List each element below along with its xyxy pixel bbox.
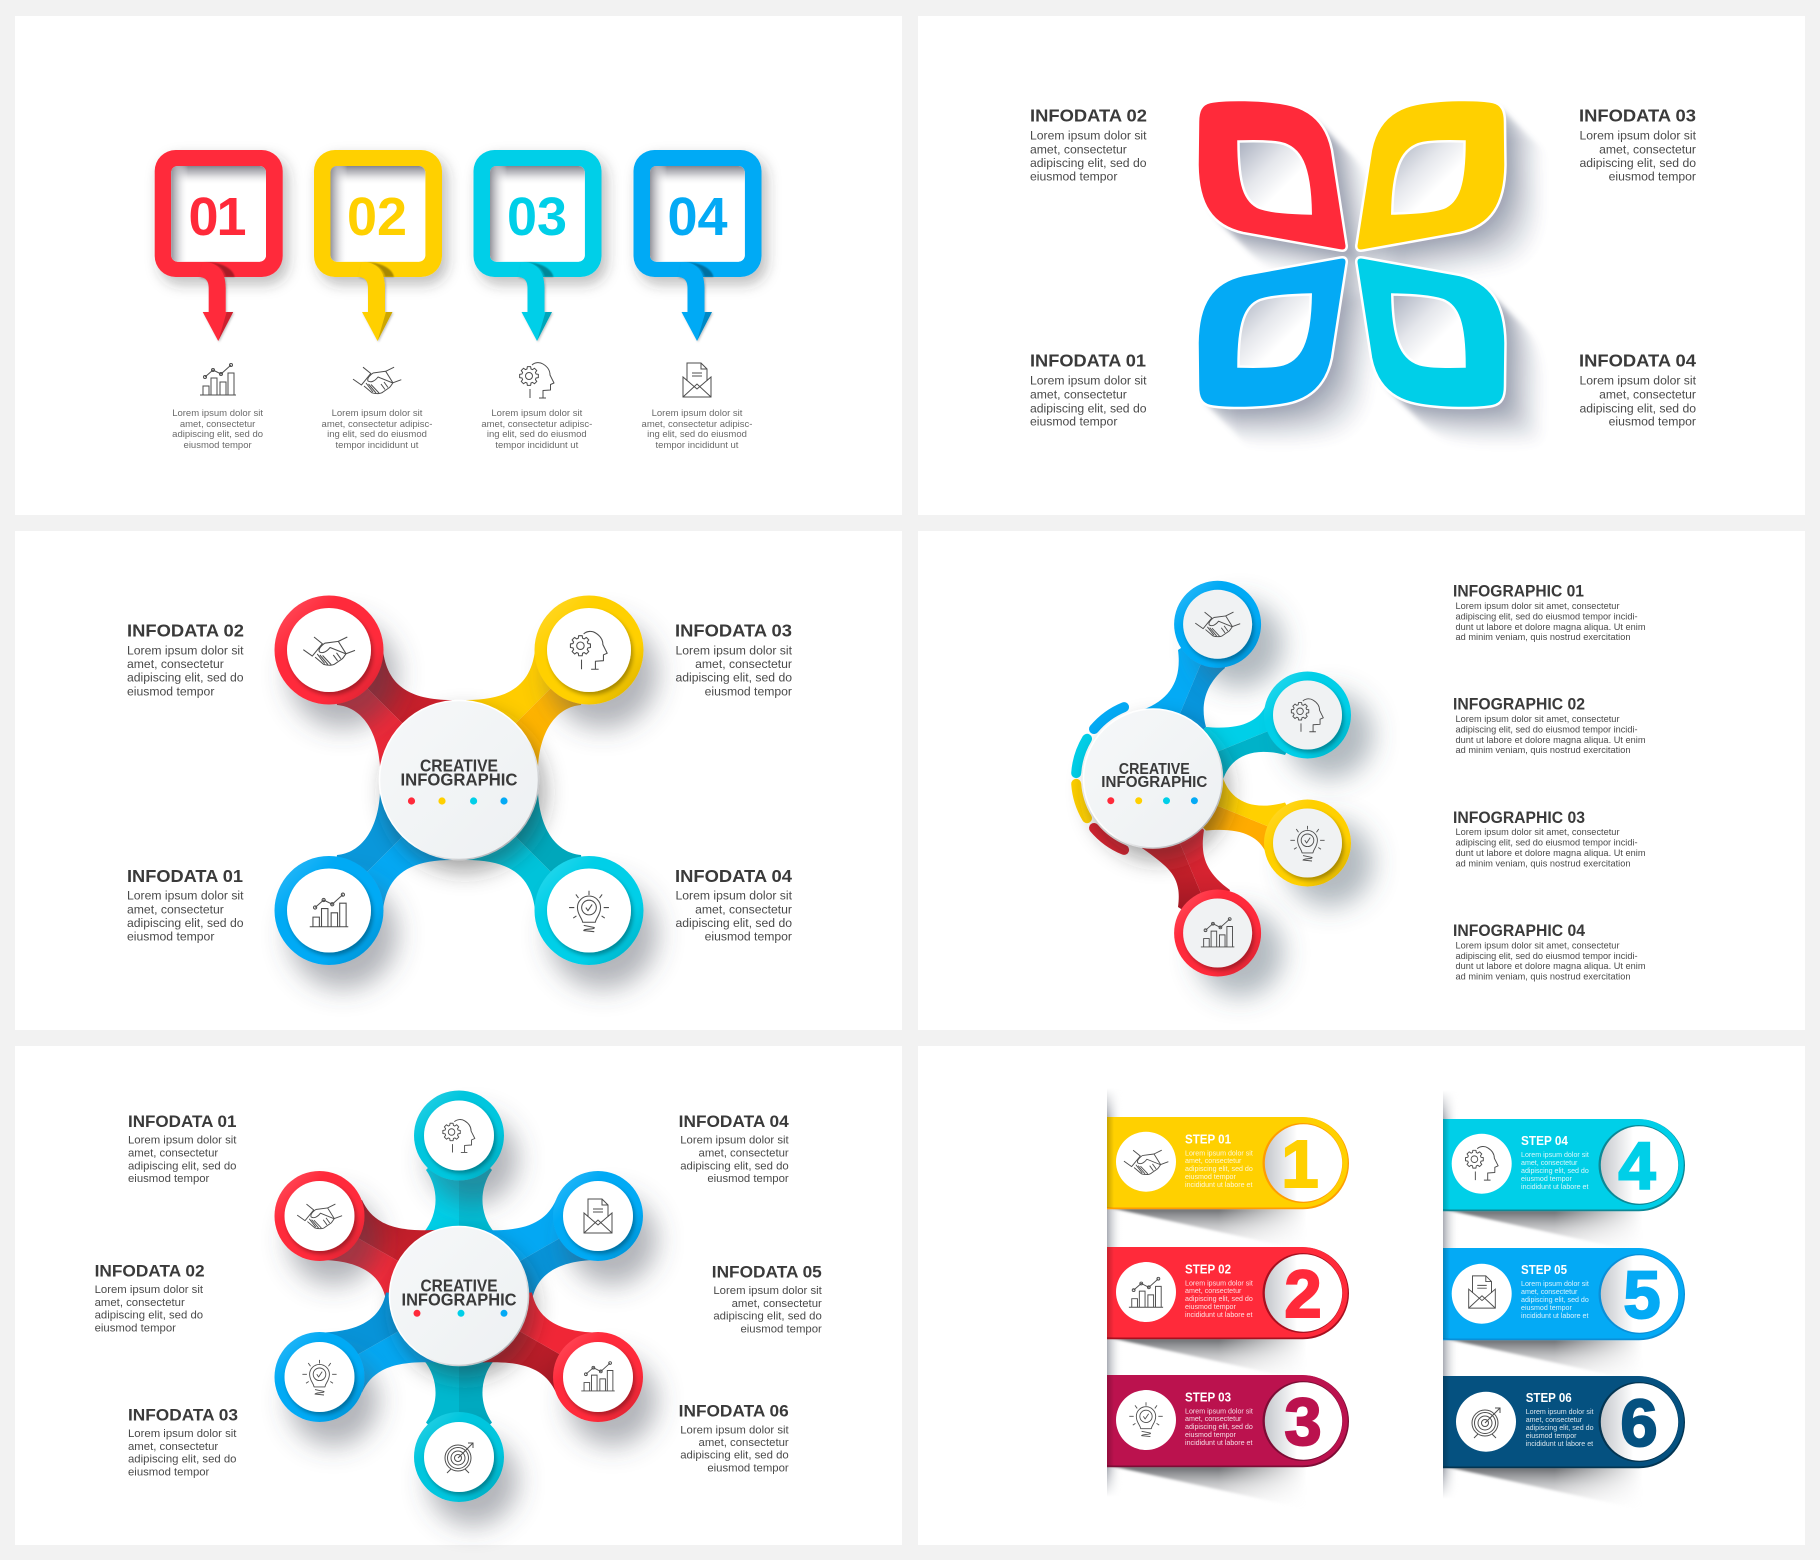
text: infodata 01: adipiscing elit, sed do bbox=[1030, 401, 1147, 415]
hub circle bbox=[1084, 709, 1222, 848]
text: infodata 03: Lorem ipsum dolor sit bbox=[1579, 128, 1697, 142]
arm: red bbox=[1142, 779, 1230, 933]
text: infographic 01: adipiscing elit, sed do eiusmod tempor incidi- bbox=[1456, 611, 1638, 621]
heading: infodata 02: INFODATA 02 bbox=[95, 1262, 205, 1280]
text: infodata 01: eiusmod tempor bbox=[127, 930, 214, 944]
arc segments bbox=[1076, 707, 1124, 850]
text: infodata 02: amet, consectetur bbox=[95, 1297, 185, 1309]
step text: amet, consectetur bbox=[1185, 1415, 1242, 1423]
text: infodata 03: eiusmod tempor bbox=[1609, 170, 1696, 184]
text: infodata 02: eiusmod tempor bbox=[1030, 170, 1117, 184]
heading: infodata 04: INFODATA 04 bbox=[679, 1113, 790, 1131]
text: infodata 03: eiusmod tempor bbox=[128, 1467, 210, 1479]
hub dots bbox=[414, 1310, 508, 1317]
text: infodata 01: amet, consectetur bbox=[1030, 388, 1127, 402]
step text: eiusmod tempor bbox=[1526, 1432, 1577, 1440]
text: infodata 02: Lorem ipsum dolor sit bbox=[1030, 128, 1147, 142]
text block 4: amet, consectetur adipisc- bbox=[642, 419, 752, 430]
node: yellow bbox=[534, 596, 644, 704]
text: infodata 02: adipiscing elit, sed do bbox=[95, 1310, 203, 1322]
step text: amet, consectetur bbox=[1185, 1287, 1242, 1295]
step 06 bbox=[1443, 1376, 1685, 1468]
heading: infodata 01: INFODATA 01 bbox=[127, 866, 243, 886]
text: infodata 05: eiusmod tempor bbox=[740, 1323, 822, 1335]
number 2: 2 bbox=[1284, 1257, 1322, 1332]
step text: eiusmod tempor bbox=[1521, 1304, 1572, 1312]
hub title: INFOGRAPHIC bbox=[400, 770, 518, 790]
panel: six-node hub bbox=[15, 1046, 902, 1545]
node: bottom bbox=[414, 1412, 504, 1502]
step title: STEP 06 bbox=[1526, 1391, 1572, 1405]
text: infographic 02: Lorem ipsum dolor sit amet, consectetur bbox=[1456, 714, 1620, 724]
text: infodata 01: eiusmod tempor bbox=[1030, 415, 1117, 429]
step 05 bbox=[1443, 1248, 1685, 1340]
hub title: INFOGRAPHIC bbox=[402, 1290, 517, 1310]
number 01: 01 bbox=[188, 187, 245, 247]
text: infodata 04: amet, consectetur bbox=[1599, 388, 1696, 402]
text block 2: ing elit, sed do eiusmod bbox=[327, 429, 427, 440]
text block 2: Lorem ipsum dolor sit bbox=[332, 408, 423, 419]
text block 1: amet, consectetur bbox=[180, 419, 255, 430]
hub title: INFOGRAPHIC bbox=[1101, 774, 1208, 791]
text: infodata 05: amet, consectetur bbox=[732, 1298, 822, 1310]
strip shadow 1 bbox=[1111, 1208, 1307, 1252]
step title: STEP 04 bbox=[1521, 1134, 1568, 1148]
number 3: 3 bbox=[1284, 1385, 1322, 1460]
step 02 bbox=[1107, 1247, 1349, 1339]
icon: chart bbox=[310, 893, 348, 927]
text block 4: tempor incididunt ut bbox=[656, 440, 739, 451]
text: infodata 01: amet, consectetur bbox=[128, 1148, 218, 1160]
step text: amet, consectetur bbox=[1521, 1288, 1578, 1296]
text: infographic 01: dunt ut labore et dolore magna aliqua. Ut enim bbox=[1456, 622, 1646, 632]
heading: infodata 02: INFODATA 02 bbox=[1030, 105, 1147, 125]
pin 03 bbox=[474, 150, 602, 341]
step text: eiusmod tempor bbox=[1521, 1175, 1572, 1183]
icon: chart bbox=[1201, 918, 1234, 947]
text: infodata 02: adipiscing elit, sed do bbox=[127, 671, 244, 685]
text: infodata 01: adipiscing elit, sed do bbox=[127, 916, 244, 930]
text: infodata 01: amet, consectetur bbox=[127, 902, 224, 916]
text: infographic 02: dunt ut labore et dolore magna aliqua. Ut enim bbox=[1456, 735, 1646, 745]
pin 04 bbox=[634, 150, 762, 341]
text: infodata 03: amet, consectetur bbox=[695, 657, 792, 671]
panel: numbered pins bbox=[15, 16, 902, 515]
text: infodata 05: Lorem ipsum dolor sit bbox=[713, 1285, 823, 1297]
step text: adipiscing elit, sed do bbox=[1185, 1165, 1253, 1173]
text: infodata 03: amet, consectetur bbox=[128, 1441, 218, 1453]
node: top bbox=[414, 1090, 504, 1180]
long shadows bbox=[1202, 105, 1546, 448]
panel: four petals bbox=[918, 16, 1805, 515]
icon: bulb bbox=[1129, 1402, 1163, 1437]
icon: chart bbox=[1129, 1277, 1163, 1307]
text: infographic 04: adipiscing elit, sed do eiusmod tempor incidi- bbox=[1456, 951, 1638, 961]
text: infographic 03: adipiscing elit, sed do eiusmod tempor incidi- bbox=[1456, 838, 1638, 848]
text block 4: Lorem ipsum dolor sit bbox=[652, 408, 743, 419]
petal: cyan bbox=[1356, 257, 1506, 408]
text: infodata 03: amet, consectetur bbox=[1599, 142, 1696, 156]
text: infodata 02: adipiscing elit, sed do bbox=[1030, 156, 1147, 170]
text: infodata 04: Lorem ipsum dolor sit bbox=[675, 889, 793, 903]
number 03: 03 bbox=[507, 187, 567, 247]
step text: adipiscing elit, sed do bbox=[1185, 1295, 1253, 1303]
text: infographic 03: Lorem ipsum dolor sit amet, consectetur bbox=[1456, 827, 1620, 837]
icon: bulb bbox=[569, 891, 609, 932]
text: infodata 04: eiusmod tempor bbox=[707, 1173, 789, 1185]
icon: handshake bbox=[297, 1204, 342, 1229]
arm: yellow bbox=[459, 650, 589, 780]
step 03 bbox=[1107, 1375, 1349, 1467]
arm: top cyan bbox=[424, 1136, 494, 1296]
step text: amet, consectetur bbox=[1526, 1416, 1583, 1424]
arm: bottom cyan bbox=[424, 1296, 494, 1456]
text: infodata 06: eiusmod tempor bbox=[707, 1463, 789, 1475]
step text: eiusmod tempor bbox=[1185, 1173, 1236, 1181]
heading: infodata 06: INFODATA 06 bbox=[679, 1403, 789, 1421]
text: infodata 01: Lorem ipsum dolor sit bbox=[127, 889, 244, 903]
text: infodata 03: adipiscing elit, sed do bbox=[675, 671, 792, 685]
icon: chart bbox=[581, 1362, 615, 1391]
icon: target bbox=[445, 1443, 473, 1473]
text: infodata 03: adipiscing elit, sed do bbox=[128, 1454, 236, 1466]
text block 4: ing elit, sed do eiusmod bbox=[647, 429, 747, 440]
step text: adipiscing elit, sed do bbox=[1521, 1167, 1589, 1175]
step text: eiusmod tempor bbox=[1185, 1431, 1236, 1439]
step title: STEP 02 bbox=[1185, 1262, 1231, 1276]
step text: amet, consectetur bbox=[1185, 1157, 1242, 1165]
heading: infodata 04: INFODATA 04 bbox=[1579, 351, 1696, 371]
node: red bbox=[274, 596, 384, 704]
text: infodata 04: eiusmod tempor bbox=[1609, 415, 1696, 429]
step text: incididunt ut labore et bbox=[1185, 1311, 1252, 1319]
icon: head with gear bbox=[520, 363, 554, 398]
arm: lower-right red bbox=[459, 1292, 598, 1392]
text: infodata 02: amet, consectetur bbox=[1030, 142, 1127, 156]
text: infodata 01: Lorem ipsum dolor sit bbox=[128, 1134, 237, 1146]
text: infodata 04: amet, consectetur bbox=[699, 1148, 789, 1160]
step title: STEP 01 bbox=[1185, 1132, 1231, 1146]
icon: head bbox=[570, 631, 607, 669]
hub circle bbox=[380, 700, 538, 860]
step text: adipiscing elit, sed do bbox=[1185, 1423, 1253, 1431]
step text: Lorem ipsum dolor sit bbox=[1185, 1279, 1253, 1287]
icon: handshake bbox=[353, 367, 401, 394]
step text: Lorem ipsum dolor sit bbox=[1185, 1149, 1253, 1157]
text: infodata 06: Lorem ipsum dolor sit bbox=[680, 1424, 790, 1436]
icon: bulb bbox=[302, 1360, 337, 1395]
text block 1: adipiscing elit, sed do bbox=[172, 429, 263, 440]
heading: infodata 01: INFODATA 01 bbox=[128, 1113, 236, 1131]
strip shadow 4 bbox=[1447, 1210, 1643, 1254]
arm: upper-left red bbox=[320, 1200, 459, 1300]
left column fold shadow bbox=[1107, 1091, 1118, 1494]
petal: yellow bbox=[1356, 100, 1506, 251]
icon: head bbox=[1291, 699, 1323, 732]
node: lower right bbox=[553, 1332, 643, 1422]
arm: cyan bbox=[1153, 705, 1308, 783]
text: infodata 06: adipiscing elit, sed do bbox=[680, 1450, 789, 1462]
heading: infographic 02: INFOGRAPHIC 02 bbox=[1453, 694, 1585, 713]
number 04: 04 bbox=[667, 187, 728, 247]
text: infographic 03: dunt ut labore et dolore magna aliqua. Ut enim bbox=[1456, 848, 1646, 858]
text block 1: Lorem ipsum dolor sit bbox=[172, 408, 263, 419]
text: infodata 02: amet, consectetur bbox=[127, 657, 224, 671]
hole: yellow bbox=[1392, 141, 1464, 214]
hub dots bbox=[1107, 797, 1198, 804]
arm: blue bbox=[329, 780, 459, 910]
heading: infodata 01: INFODATA 01 bbox=[1030, 351, 1146, 371]
text: infodata 04: adipiscing elit, sed do bbox=[675, 916, 792, 930]
heading: infographic 01: INFOGRAPHIC 01 bbox=[1453, 581, 1584, 600]
text: infographic 02: ad minim veniam, quis nostrud exercitation bbox=[1456, 745, 1630, 755]
icon: head bbox=[1466, 1146, 1498, 1180]
arm: upper-right blue bbox=[459, 1200, 598, 1300]
step text: eiusmod tempor bbox=[1185, 1303, 1236, 1311]
strip shadow 6 bbox=[1447, 1467, 1643, 1511]
icon: handshake bbox=[1195, 612, 1240, 637]
step text: Lorem ipsum dolor sit bbox=[1521, 1280, 1589, 1288]
heading: infodata 03: INFODATA 03 bbox=[675, 621, 792, 641]
icon: handshake bbox=[303, 637, 355, 665]
step text: incididunt ut labore et bbox=[1185, 1181, 1252, 1189]
heading: infodata 03: INFODATA 03 bbox=[1579, 105, 1696, 125]
text: infodata 04: Lorem ipsum dolor sit bbox=[680, 1134, 790, 1146]
node: blue bbox=[274, 856, 384, 965]
text: infographic 01: ad minim veniam, quis nostrud exercitation bbox=[1456, 632, 1630, 642]
heading: infodata 05: INFODATA 05 bbox=[712, 1263, 822, 1281]
step title: STEP 05 bbox=[1521, 1263, 1567, 1277]
step text: adipiscing elit, sed do bbox=[1526, 1424, 1594, 1432]
text: infodata 02: eiusmod tempor bbox=[95, 1323, 176, 1335]
number 5: 5 bbox=[1623, 1258, 1661, 1333]
icon: mail bbox=[584, 1199, 612, 1233]
arm: cyan bbox=[459, 780, 589, 910]
hub circle bbox=[390, 1226, 528, 1366]
pin 01 bbox=[155, 150, 283, 341]
step 01 bbox=[1107, 1117, 1349, 1209]
strip shadow 2 bbox=[1111, 1338, 1307, 1382]
text: infographic 04: ad minim veniam, quis nostrud exercitation bbox=[1456, 972, 1630, 982]
heading: infodata 03: INFODATA 03 bbox=[128, 1407, 238, 1425]
hub title: CREATIVE bbox=[420, 1275, 498, 1295]
step text: adipiscing elit, sed do bbox=[1521, 1296, 1589, 1304]
panel: branching hub bbox=[918, 531, 1805, 1030]
number 02: 02 bbox=[347, 187, 407, 247]
step text: Lorem ipsum dolor sit bbox=[1526, 1408, 1594, 1416]
text: infodata 04: adipiscing elit, sed do bbox=[680, 1160, 789, 1172]
hub title: CREATIVE bbox=[1119, 761, 1190, 778]
text block 2: amet, consectetur adipisc- bbox=[322, 419, 432, 430]
text: infodata 01: Lorem ipsum dolor sit bbox=[1030, 374, 1147, 388]
step text: incididunt ut labore et bbox=[1521, 1183, 1588, 1191]
panel: four-node hub bbox=[15, 531, 902, 1030]
node: lower left bbox=[274, 1332, 364, 1422]
text: infodata 04: eiusmod tempor bbox=[705, 930, 792, 944]
arm: blue bbox=[1142, 624, 1225, 778]
icon: mail bbox=[683, 363, 711, 397]
number 1: 1 bbox=[1281, 1127, 1319, 1202]
icon: chart bbox=[200, 364, 236, 395]
icon: mail bbox=[1469, 1276, 1495, 1308]
text: infodata 04: amet, consectetur bbox=[695, 902, 792, 916]
text: infodata 02: Lorem ipsum dolor sit bbox=[95, 1284, 204, 1296]
step text: incididunt ut labore et bbox=[1526, 1440, 1593, 1448]
step text: amet, consectetur bbox=[1521, 1159, 1578, 1167]
text: infodata 01: adipiscing elit, sed do bbox=[128, 1160, 236, 1172]
text block 3: Lorem ipsum dolor sit bbox=[491, 408, 583, 419]
hole: blue bbox=[1238, 294, 1311, 367]
text: infodata 04: adipiscing elit, sed do bbox=[1579, 401, 1696, 415]
arm: yellow bbox=[1153, 774, 1308, 852]
petal: blue bbox=[1198, 257, 1347, 408]
text: infographic 03: ad minim veniam, quis nostrud exercitation bbox=[1456, 858, 1630, 868]
node: cyan bbox=[1264, 672, 1351, 758]
node: red bbox=[1174, 890, 1261, 976]
text: infodata 03: Lorem ipsum dolor sit bbox=[128, 1428, 237, 1440]
text: infodata 03: Lorem ipsum dolor sit bbox=[675, 643, 793, 657]
text block 3: amet, consectetur adipisc- bbox=[481, 419, 592, 430]
arm: lower-left blue bbox=[320, 1292, 459, 1392]
heading: infodata 02: INFODATA 02 bbox=[127, 621, 244, 641]
text: infodata 01: eiusmod tempor bbox=[128, 1173, 210, 1185]
heading: infodata 04: INFODATA 04 bbox=[675, 866, 792, 886]
text: infodata 06: amet, consectetur bbox=[699, 1437, 789, 1449]
step text: Lorem ipsum dolor sit bbox=[1521, 1151, 1589, 1159]
number 6: 6 bbox=[1620, 1386, 1658, 1461]
strip shadow 3 bbox=[1111, 1466, 1307, 1510]
icon: head bbox=[443, 1120, 475, 1152]
panel: six steps bbox=[918, 1046, 1805, 1545]
text: infodata 03: adipiscing elit, sed do bbox=[1579, 156, 1696, 170]
text: infographic 04: dunt ut labore et dolore magna aliqua. Ut enim bbox=[1456, 961, 1646, 971]
number 4: 4 bbox=[1618, 1129, 1656, 1204]
text: infodata 05: adipiscing elit, sed do bbox=[713, 1311, 822, 1323]
text: infodata 04: Lorem ipsum dolor sit bbox=[1579, 374, 1697, 388]
step text: Lorem ipsum dolor sit bbox=[1185, 1407, 1253, 1415]
node: upper left bbox=[274, 1171, 364, 1261]
text block 3: tempor incididunt ut bbox=[495, 440, 579, 451]
text: infographic 01: Lorem ipsum dolor sit amet, consectetur bbox=[1456, 601, 1620, 611]
text: infographic 02: adipiscing elit, sed do eiusmod tempor incidi- bbox=[1456, 724, 1638, 734]
text block 3: ing elit, sed do eiusmod bbox=[487, 429, 587, 440]
heading: infographic 03: INFOGRAPHIC 03 bbox=[1453, 808, 1585, 827]
text: infodata 02: Lorem ipsum dolor sit bbox=[127, 643, 244, 657]
strip shadow 5 bbox=[1447, 1339, 1643, 1383]
node: upper right bbox=[553, 1171, 643, 1261]
heading: infographic 04: INFOGRAPHIC 04 bbox=[1453, 921, 1585, 940]
icon: bulb bbox=[1290, 826, 1325, 861]
text block 1: eiusmod tempor bbox=[184, 440, 252, 451]
arm: red bbox=[329, 650, 459, 780]
text block 2: tempor incididunt ut bbox=[336, 440, 419, 451]
step 04 bbox=[1443, 1119, 1685, 1211]
petal: red bbox=[1198, 100, 1347, 251]
node: blue bbox=[1174, 581, 1261, 668]
hub dots bbox=[408, 797, 508, 805]
icon: handshake bbox=[1124, 1150, 1168, 1175]
hub title: CREATIVE bbox=[420, 755, 498, 775]
hole: red bbox=[1238, 141, 1311, 214]
icon: target bbox=[1472, 1408, 1500, 1438]
step text: incididunt ut labore et bbox=[1185, 1439, 1252, 1447]
step title: STEP 03 bbox=[1185, 1390, 1231, 1404]
text: infodata 03: eiusmod tempor bbox=[705, 684, 792, 698]
node: yellow bbox=[1264, 800, 1351, 886]
step text: incididunt ut labore et bbox=[1521, 1312, 1588, 1320]
pin 02 bbox=[314, 150, 442, 341]
text: infodata 02: eiusmod tempor bbox=[127, 684, 214, 698]
hole: cyan bbox=[1392, 294, 1464, 367]
text: infographic 04: Lorem ipsum dolor sit amet, consectetur bbox=[1456, 940, 1620, 950]
right column fold shadow bbox=[1443, 1093, 1454, 1496]
node: cyan bbox=[534, 856, 644, 965]
